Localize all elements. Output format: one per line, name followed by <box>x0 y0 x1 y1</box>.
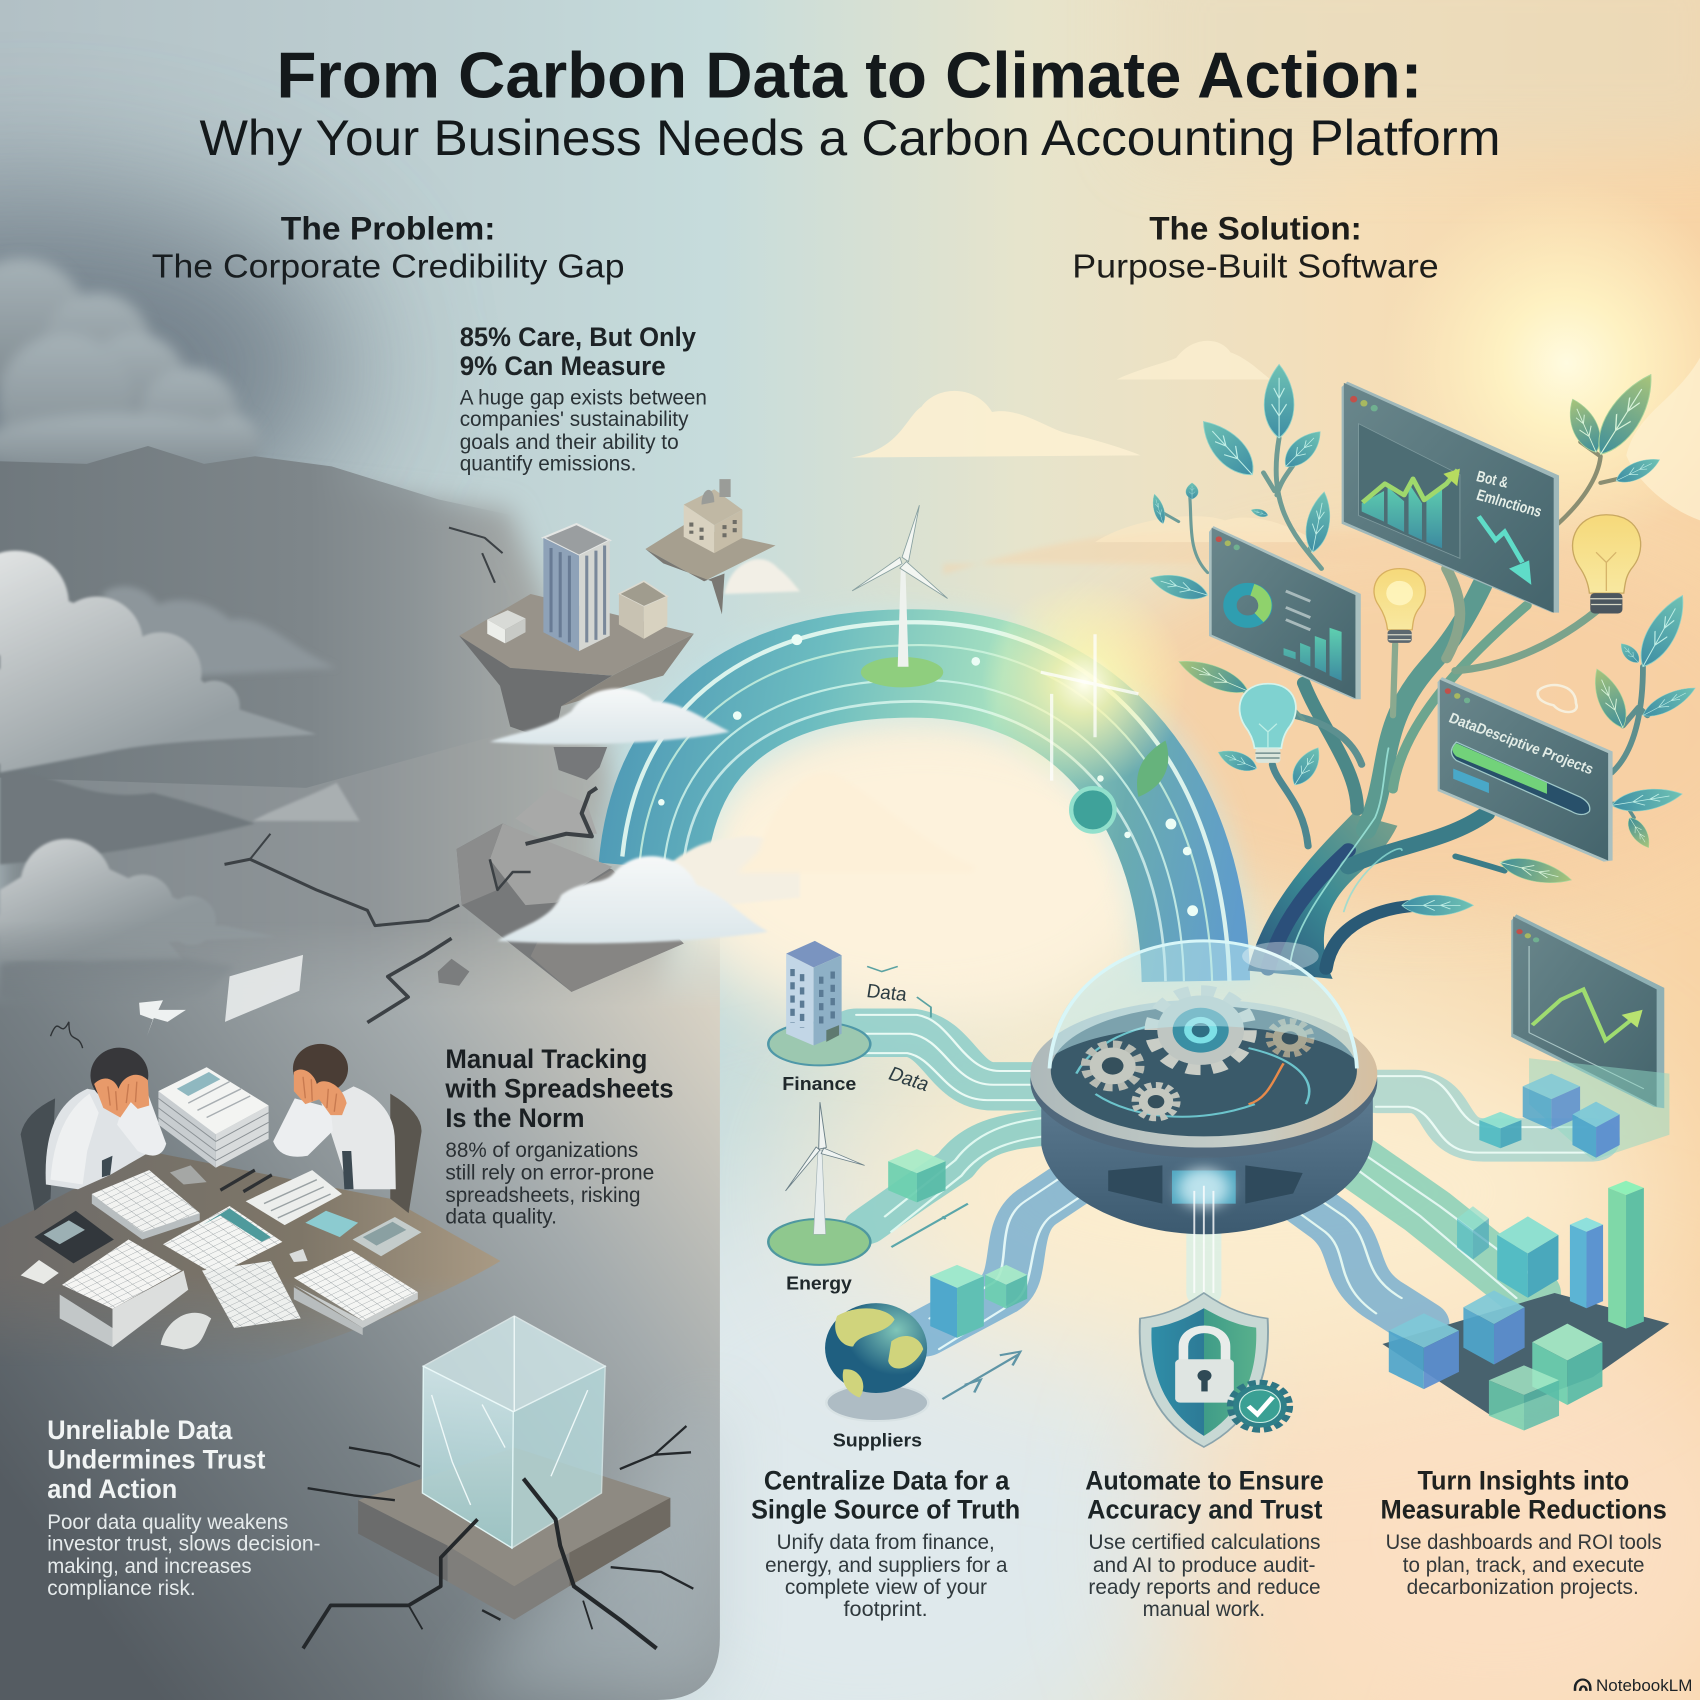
dashboard screen: donut and bars <box>1209 526 1361 699</box>
column: automate: Use certified calculations <box>1088 1531 1321 1554</box>
floating island with small factory <box>645 479 776 614</box>
text: manual tracking: 88% of organizations <box>445 1139 638 1162</box>
calculators <box>34 1211 422 1263</box>
text: manual tracking: data quality. <box>445 1205 557 1229</box>
panel bottom corner highlight <box>455 1388 720 1700</box>
screen label <box>1474 468 1544 521</box>
worker left <box>46 1048 166 1189</box>
lower dark ridge <box>0 772 255 864</box>
broken cliff <box>438 788 684 992</box>
screen label: Bot & <box>1475 468 1510 492</box>
data pipes <box>856 1015 1593 1349</box>
column: automate <box>1085 1466 1324 1621</box>
column: centralize data: footprint. <box>844 1598 928 1621</box>
faint cloud shard <box>253 783 360 821</box>
label: data: Data <box>865 979 909 1005</box>
column: centralize data: energy, and suppliers for a <box>765 1554 1008 1577</box>
ground cracks <box>224 528 597 1023</box>
glass dome <box>1050 941 1357 1068</box>
heading: the solution: The Solution: <box>1149 211 1362 247</box>
stormy mountains and clouds <box>0 446 515 1007</box>
pipe: finance <box>856 1015 1044 1100</box>
column: automate: manual work. <box>1143 1598 1265 1621</box>
column: automate: and AI to produce audit- <box>1093 1554 1315 1577</box>
small connector on energy <box>891 1204 968 1247</box>
title <box>199 39 1501 166</box>
glass cube on cracked slab <box>358 1316 670 1620</box>
pipe: suppliers <box>923 1150 1127 1349</box>
column: centralize data: Single Source of Truth <box>751 1496 1020 1525</box>
column: automate: Accuracy and Trust <box>1087 1496 1322 1525</box>
icon: yellow lightbulb right <box>1573 515 1641 613</box>
column: centralize data: Unify data from finance, <box>777 1531 995 1554</box>
icon: wind turbine <box>768 1102 870 1265</box>
lower screen with trend chart <box>1511 914 1664 1108</box>
text: 85 percent care stat: companies' sustainability <box>460 406 689 431</box>
column: turn insights: decarbonization projects. <box>1407 1576 1639 1599</box>
icon: data connector top <box>867 966 931 1017</box>
column: turn insights <box>1381 1466 1667 1599</box>
icon: arrow <box>942 1352 1020 1399</box>
tree trunk and branches <box>1161 438 1647 979</box>
gears <box>1086 991 1310 1118</box>
icon: cyan lightbulb <box>1240 684 1296 763</box>
desk clutter <box>21 1165 358 1349</box>
flying papers <box>51 955 303 1048</box>
text: unreliable data: Undermines Trust <box>47 1444 266 1475</box>
heading: the problem: The Corporate Credibility Gap <box>152 249 624 286</box>
screen label: Emlnctions <box>1474 486 1544 521</box>
dashboard screen: growth and emissions <box>1342 382 1559 613</box>
text: manual tracking: with Spreadsheets <box>444 1073 674 1104</box>
text: manual tracking: Is the Norm <box>445 1103 585 1133</box>
pipe: insights <box>1376 1076 1593 1153</box>
text: unreliable data: compliance risk. <box>47 1577 196 1600</box>
tree leaves <box>1147 364 1699 916</box>
column: automate: ready reports and reduce <box>1088 1576 1321 1599</box>
icon: yellow lightbulb center <box>1374 569 1425 643</box>
padlock <box>1175 1329 1234 1403</box>
title: From Carbon Data to Climate Action: <box>276 39 1422 112</box>
floating island with tall building <box>459 524 694 780</box>
icon: data badge and leaf on arch <box>1071 740 1168 832</box>
grey ground behind problem side <box>0 455 672 1041</box>
sun and warm clouds <box>851 179 1700 548</box>
data flow hub and outcomes <box>751 914 1692 1694</box>
heading: the solution <box>1072 211 1439 286</box>
check badge <box>1231 1383 1289 1430</box>
panel lower contents <box>0 955 693 1648</box>
text: 85 percent care stat: goals and their ability to <box>460 429 679 454</box>
pipe: reductions <box>1255 1130 1542 1324</box>
mountain ridge <box>0 446 515 788</box>
text: 85 percent care stat: 85% Care, But Only <box>460 321 696 352</box>
worker right <box>273 1044 396 1189</box>
text: unreliable data: Poor data quality weakens <box>47 1510 288 1534</box>
column: centralize data <box>751 1466 1020 1621</box>
text: manual tracking: spreadsheets, risking <box>445 1184 641 1207</box>
icon: security shield <box>1140 1293 1289 1447</box>
icon: finance building <box>768 941 870 1065</box>
text: 85 percent care stat <box>460 321 707 476</box>
meeting table <box>0 1154 500 1344</box>
growth tree with dashboards <box>1147 364 1699 979</box>
text: unreliable data: Unreliable Data <box>47 1414 233 1445</box>
icon: wind turbine on arch <box>852 505 948 687</box>
warm cloud inside arch <box>737 772 976 873</box>
text: 85 percent care stat: quantify emissions. <box>460 451 636 476</box>
dark band below cloud <box>0 959 235 1007</box>
upper left cloud <box>0 258 260 475</box>
ghost cloud behind <box>102 586 337 678</box>
cloud: large grey <box>0 551 316 773</box>
left panel <box>0 867 720 1700</box>
text: unreliable data: and Action <box>47 1473 177 1504</box>
column: turn insights: Turn Insights into <box>1417 1466 1629 1496</box>
arch glow sparkle <box>981 580 1187 786</box>
heading: the solution: Purpose-Built Software <box>1072 249 1439 286</box>
paper stack center <box>158 1067 269 1168</box>
text: unreliable data: making, and increases <box>47 1555 252 1578</box>
central beam <box>1178 1168 1229 1303</box>
text: unreliable data: investor trust, slows decision- <box>47 1532 320 1555</box>
floating islands, cliff and white clouds <box>224 479 800 1023</box>
data arch bridge <box>622 622 1229 981</box>
spreadsheets on table <box>60 1170 418 1347</box>
text: manual tracking: still rely on error-prone <box>445 1161 654 1185</box>
label: energy: Energy <box>786 1273 852 1294</box>
icon: globe <box>825 1303 928 1421</box>
cracks around slab <box>303 1426 693 1648</box>
text: 85 percent care stat: 9% Can Measure <box>460 350 666 381</box>
pipe: center glow <box>1176 1186 1231 1293</box>
hub base <box>1030 1000 1377 1234</box>
bar chart cubes on platform <box>1382 1181 1669 1431</box>
column: centralize data: Centralize Data for a <box>764 1466 1010 1496</box>
text: 85 percent care stat: A huge gap exists between <box>460 384 707 409</box>
cloud: lower grey <box>0 839 276 964</box>
pipe: energy <box>866 1117 1064 1232</box>
heading: the problem: The Problem: <box>281 211 495 247</box>
column: centralize data: complete view of your <box>785 1576 987 1599</box>
cubes: insights group <box>1479 1058 1669 1160</box>
screen label: DataDesciptive Projects <box>1446 710 1596 778</box>
column: automate: Automate to Ensure <box>1085 1466 1324 1496</box>
white clouds <box>490 559 800 943</box>
text: manual tracking: Manual Tracking <box>445 1044 647 1074</box>
label: data lower: Data <box>885 1062 934 1095</box>
cubes on suppliers and energy pipes <box>888 1149 1027 1338</box>
label: suppliers: Suppliers <box>833 1431 922 1451</box>
text: unreliable data <box>47 1414 320 1600</box>
dashboard screen: project progress <box>1438 677 1613 862</box>
small cloud icon <box>1538 685 1577 712</box>
heading: the problem <box>152 211 624 286</box>
label: finance: Finance <box>782 1074 856 1094</box>
title: Why Your Business Needs a Carbon Accounting Platform <box>199 110 1501 166</box>
text: manual tracking <box>444 1044 674 1229</box>
chairs <box>21 1094 422 1213</box>
